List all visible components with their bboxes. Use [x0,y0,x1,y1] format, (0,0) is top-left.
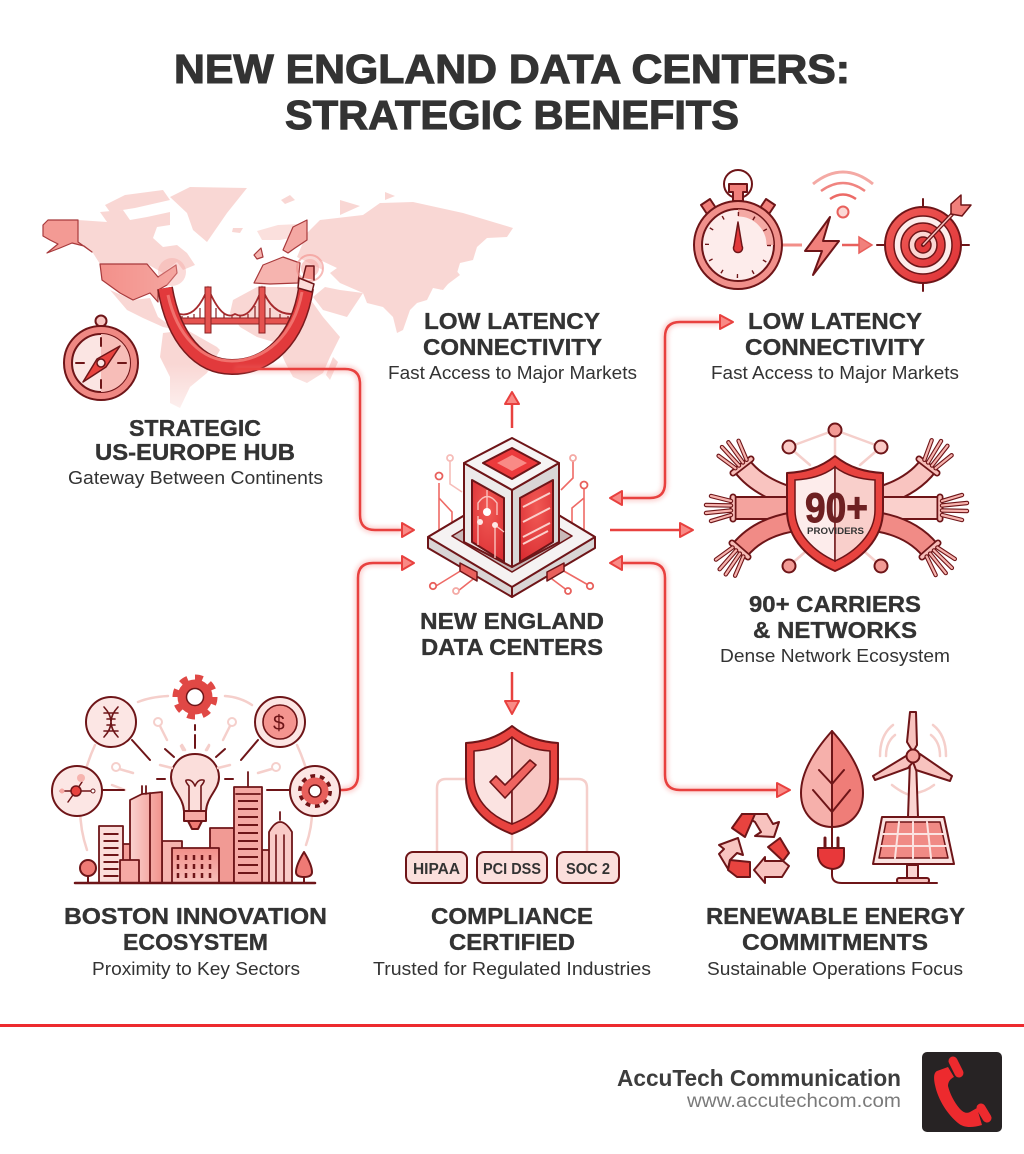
text: carriers: & NETWORKS [753,617,917,643]
leaf [801,731,863,847]
solar panel [873,817,954,883]
text: renewable: COMMITMENTS [742,929,928,955]
icon: renewable energy [719,712,954,883]
text: low latency right: Fast Access to Major Markets [711,363,959,383]
text: new england data centers: DATA CENTERS [421,634,603,660]
text: boston [64,903,327,979]
cable [165,288,306,367]
icon: data center [428,438,595,597]
text: new england data centers: NEW ENGLAND [420,608,604,634]
icon: compliance shield and badges [406,726,619,883]
bolt [805,217,839,275]
icon: world map with cable bridge [43,187,513,408]
molecule circle [52,766,102,816]
badge: HIPAA [406,852,467,883]
shield [787,456,883,571]
text: compliance: COMPLIANCE [431,903,593,929]
world map [78,187,513,408]
arrow: data centers to low latency right [610,315,733,505]
icon: boston innovation skyline [52,678,340,883]
text: strategic hub: Gateway Between Continents [68,468,323,488]
text: compliance [373,903,651,979]
text: strategic hub [68,415,323,488]
icon: phone logo [922,1052,1002,1132]
text: low latency right: CONNECTIVITY [745,334,925,360]
text: renewable: RENEWABLE ENERGY [706,903,965,929]
footer brand: www.accutechcom.com [686,1091,901,1112]
title: STRATEGIC BENEFITS [285,92,739,138]
connector spokes [102,740,290,790]
top gear [176,678,214,716]
icon: cables and 90+ shield [706,424,967,580]
arrow: boston to data centers [340,556,414,790]
turbine [873,712,952,817]
panel details [478,490,504,558]
badge: SOC 2: SOC 2 [566,861,610,878]
footer brand: AccuTech Communication [617,1065,901,1091]
text: compliance: CERTIFIED [449,929,575,955]
icon: stopwatch, bolt and target [694,170,971,291]
text: boston: BOSTON INNOVATION [64,903,327,929]
dna circle [86,697,136,747]
badge: PCI DSS [477,852,547,883]
text: compliance: Trusted for Regulated Industries [373,959,651,979]
bulb [157,725,233,829]
highlighted USA and Europe [43,220,307,302]
badge: HIPAA: HIPAA [413,861,460,878]
title: NEW ENGLAND DATA CENTERS: [174,46,850,92]
badge: PCI DSS: PCI DSS [483,861,541,878]
cables [733,466,940,550]
footer brand [617,1065,901,1112]
dollar circle: $ [273,712,285,735]
text: low latency center: CONNECTIVITY [423,334,602,360]
text: low latency right: LOW LATENCY [748,308,922,334]
tower [464,463,512,567]
network nodes [782,424,888,572]
recycle symbol [719,814,789,883]
arrow: up to low latency [505,392,519,428]
text: carriers [720,591,950,666]
90+ text: 90+ [805,484,868,531]
text: low latency right [711,308,959,383]
text: low latency center [388,308,637,383]
badge: SOC 2 [557,852,619,883]
plug [818,838,937,883]
faint sparks [116,722,275,773]
footer divider [0,1024,1024,1027]
text: strategic hub: US-EUROPE HUB [95,439,295,465]
bridge [178,287,296,333]
trees [88,860,304,883]
target [877,195,971,291]
wifi [813,172,873,218]
right gear circle [290,766,340,816]
arrow: hub to data centers [235,369,414,537]
arrow: data centers to carriers [610,523,693,537]
text: low latency center: LOW LATENCY [424,308,600,334]
circuit traces [436,458,590,591]
text: carriers: Dense Network Ecosystem [720,646,950,666]
ground line [75,882,315,884]
shield [466,726,558,834]
text: carriers: 90+ CARRIERS [749,591,921,617]
text: boston: Proximity to Key Sectors [92,959,300,979]
platform [428,487,595,597]
arrow: down to compliance [505,672,519,714]
stopwatch [694,170,782,289]
text: strategic hub: STRATEGIC [129,415,261,441]
arrow: data centers to renewable [610,556,790,797]
text: boston: ECOSYSTEM [123,929,268,955]
text: renewable: Sustainable Operations Focus [707,959,963,979]
icon: compass [64,316,138,400]
dollar circle [255,697,305,747]
back buildings [99,772,292,883]
title [174,46,850,138]
icon: cables and 90+ shield: PROVIDERS [807,526,864,537]
text: renewable [706,903,965,979]
text: new england data centers [420,608,604,660]
text: low latency center: Fast Access to Major Markets [388,363,637,383]
pale arc [80,696,312,850]
windows [104,833,118,880]
